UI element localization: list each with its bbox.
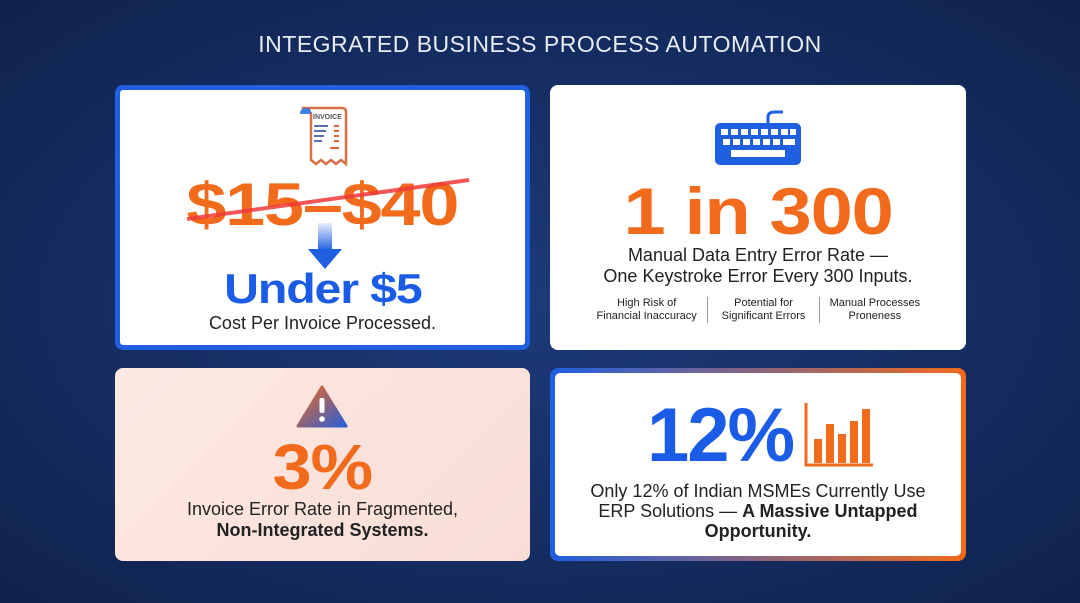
panel: data entry error (550, 85, 966, 350)
title: INTEGRATED BUSINESS PROCESS AUTOMATION (258, 31, 822, 57)
icon: warning (296, 385, 348, 428)
risk columns: Significant Errors (722, 310, 805, 322)
icon: invoice (300, 106, 348, 166)
icon: bar chart (804, 403, 873, 466)
description: Only 12% of Indian MSMEs Currently Use (590, 481, 926, 501)
icon: invoice: INVOICE (313, 114, 342, 121)
risk columns: Financial Inaccuracy (597, 310, 697, 322)
description: Manual Data Entry Error Rate — (628, 245, 888, 265)
icon: keyboard (715, 110, 801, 165)
strike line (186, 178, 470, 221)
big stat: 1 in 300 (623, 174, 893, 248)
risk columns: Proneness (849, 310, 901, 322)
big stat: 12% (647, 393, 793, 478)
description: Non-Integrated Systems. (216, 520, 429, 540)
description (603, 245, 913, 286)
description: Opportunity. (705, 521, 811, 541)
panel: invoice error rate (115, 368, 530, 561)
description: ERP Solutions — A Massive Untapped (598, 501, 918, 521)
description (187, 499, 458, 540)
risk columns: Potential for (734, 297, 793, 309)
panel: ERP adoption (550, 368, 966, 561)
description: One Keystroke Error Every 300 Inputs. (603, 266, 913, 286)
risk columns: High Risk of (617, 297, 676, 309)
risk columns (597, 297, 920, 323)
panel: invoice cost (115, 85, 530, 350)
crossed old cost: $15–$40 (187, 171, 458, 238)
big stat: 3% (273, 431, 372, 503)
new cost: Under $5 (224, 265, 421, 312)
risk columns: Manual Processes (830, 297, 920, 309)
caption: Cost Per Invoice Processed. (209, 313, 436, 333)
description (590, 481, 926, 541)
arrow: down (308, 223, 342, 269)
description: Invoice Error Rate in Fragmented, (187, 499, 458, 519)
